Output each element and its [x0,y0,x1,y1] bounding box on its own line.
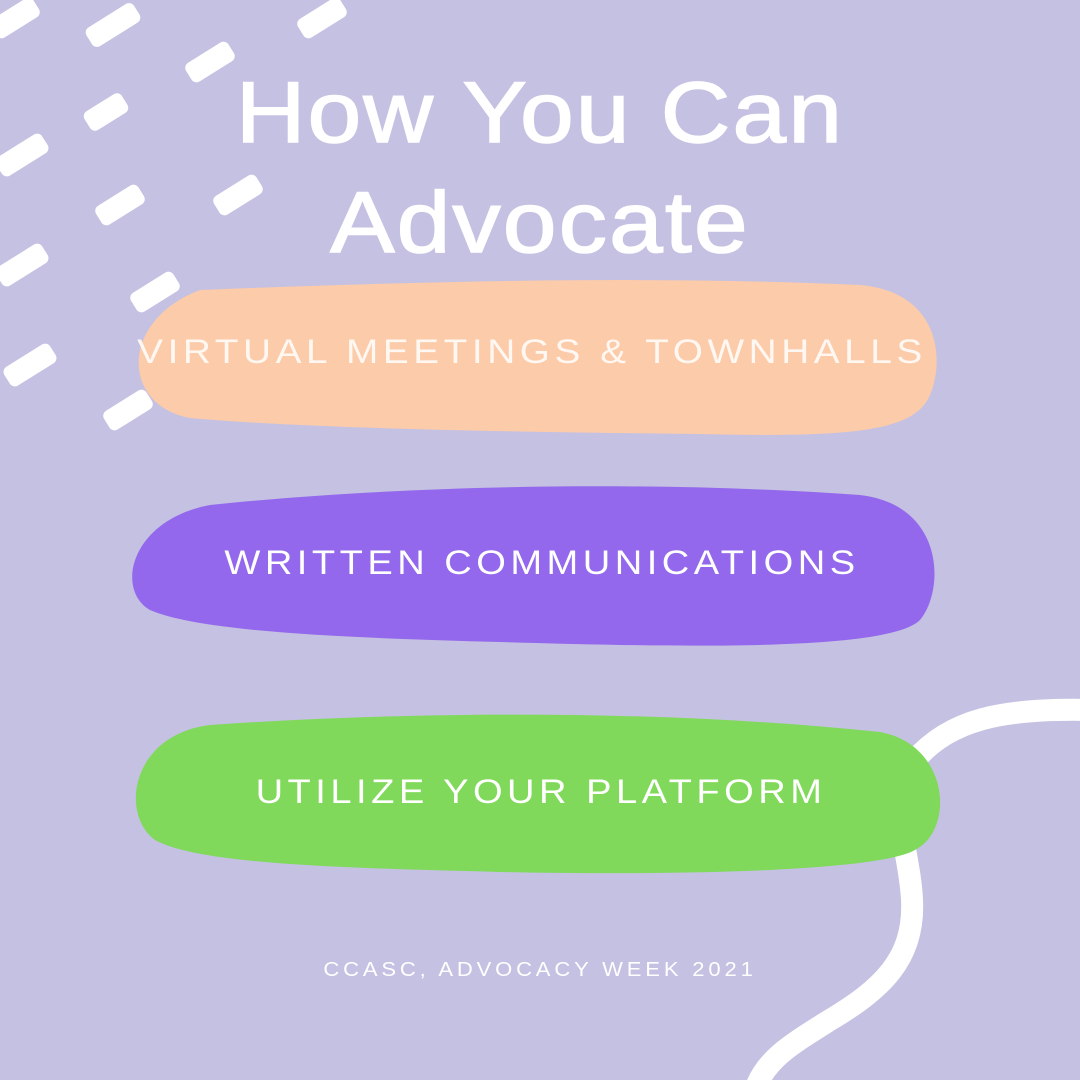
title: Advocate [330,175,750,271]
label: utilize platform: UTILIZE YOUR PLATFORM [256,773,826,811]
footer: CCASC, ADVOCACY WEEK 2021 [323,959,757,981]
label: written communications: WRITTEN COMMUNICATIONS [224,544,860,582]
label: virtual meetings: VIRTUAL MEETINGS & TOWNHALLS [137,333,927,371]
title: How You Can [236,65,844,161]
title [236,65,844,271]
